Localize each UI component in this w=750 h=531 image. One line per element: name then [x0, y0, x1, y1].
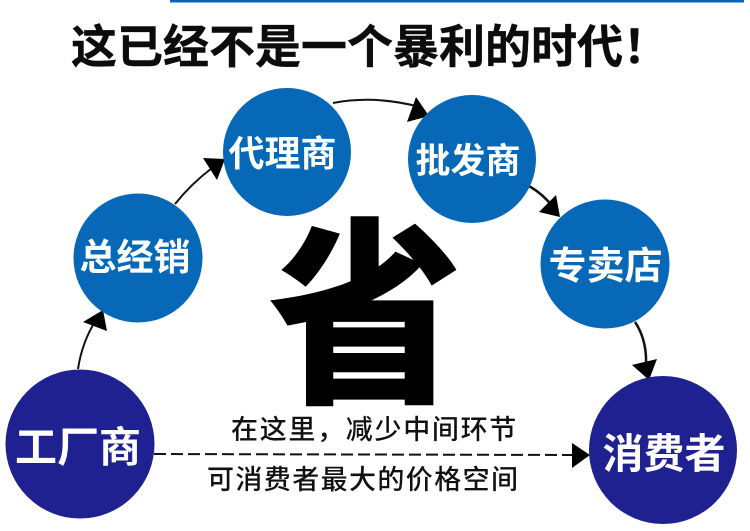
arrow: agent to wholesaler	[333, 97, 429, 122]
node: agent: 代理商	[228, 133, 337, 174]
node: wholesaler: 批发商	[415, 142, 521, 181]
arrow: wholesaler to specialty store	[529, 186, 560, 217]
node: consumer: 消费者	[602, 431, 726, 477]
node: specialty store	[540, 200, 670, 328]
node: consumer	[589, 376, 737, 524]
node: wholesaler	[408, 95, 536, 223]
dashed arrow: factory to consumer	[154, 443, 590, 468]
caption above dashed line: 在这里，减少中间环节	[231, 415, 518, 445]
node: general distributor: 总经销	[80, 237, 190, 278]
node: specialty store: 专卖店	[548, 246, 663, 288]
big character: 省	[268, 206, 463, 430]
node: factory: 工厂商	[15, 424, 141, 471]
caption below dashed line: 可消费者最大的价格空间	[207, 465, 519, 495]
node: factory	[6, 370, 154, 518]
top bar	[170, 0, 744, 2]
node: agent	[223, 88, 351, 216]
arrow: general distributor to agent	[175, 158, 225, 204]
arrow: specialty store to consumer	[632, 322, 657, 380]
arrow: factory to general distributor	[78, 310, 107, 369]
title: 这已经不是一个暴利的时代！	[71, 21, 669, 73]
node: general distributor	[74, 194, 202, 322]
